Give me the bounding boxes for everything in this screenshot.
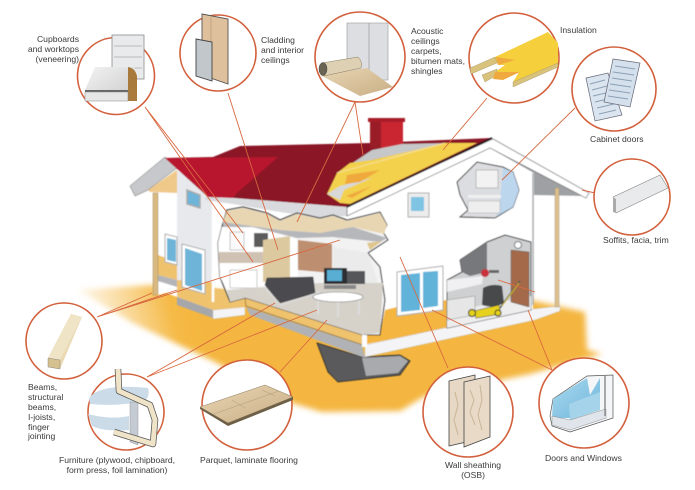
label: beams: structural: [28, 392, 63, 402]
label: beams: beams,: [28, 402, 56, 412]
red tool: [481, 269, 499, 277]
large window: [397, 266, 443, 316]
sofa: [265, 277, 320, 305]
label: acoustic: bitumen mats,: [411, 56, 465, 66]
computer: [324, 268, 365, 289]
circle: acoustic ceilings, carpets: [315, 12, 405, 102]
label: acoustic: ceilings: [411, 36, 440, 46]
label: cladding: Cladding: [261, 35, 295, 45]
circle: cabinet doors: [572, 47, 656, 131]
circle: wall sheathing: [423, 367, 513, 457]
left wing: [130, 157, 245, 319]
label: beams: finger: [28, 422, 50, 432]
label: cupboards: and worktops: [28, 44, 79, 54]
living room cutaway: [218, 207, 388, 345]
label: cabinet doors: Cabinet doors: [590, 134, 644, 144]
label: beams: I-joists,: [28, 412, 55, 422]
leader lines: [97, 93, 595, 377]
circle: furniture: [88, 369, 164, 450]
ground shadow: [78, 285, 602, 412]
label: acoustic: carpets,: [411, 46, 442, 56]
label: cupboards: Cupboards: [37, 34, 79, 44]
tyres: [482, 285, 504, 307]
roof insulation cutaway: [327, 143, 477, 204]
label: cladding: ceilings: [261, 55, 290, 65]
label: soffits: Soffits, facia, trim: [603, 235, 669, 245]
label: beams: Beams,: [28, 382, 57, 392]
label: parquet: Parquet, laminate flooring: [200, 455, 298, 465]
label: wall sheathing: Wall sheathing: [445, 460, 501, 470]
label: acoustic: shingles: [411, 66, 443, 76]
label: insulation: Insulation: [560, 25, 597, 35]
chimney: [368, 118, 405, 148]
roof: [165, 138, 492, 218]
door: [511, 250, 529, 307]
circle: soffits: [594, 159, 670, 235]
circle: beams: [26, 303, 102, 379]
small upper window: [408, 193, 429, 217]
garage cutaway: [447, 235, 531, 328]
label: acoustic: Acoustic: [411, 26, 444, 36]
label: furniture: form press, foil lamination): [67, 465, 168, 475]
circle: parquet: [200, 360, 293, 450]
circle: cupboards and worktops: [78, 35, 154, 114]
coffee table: [313, 292, 363, 317]
circle: cladding: [180, 14, 256, 91]
house illustration: [130, 118, 589, 382]
box: [447, 296, 475, 320]
label: cladding: and interior: [261, 45, 304, 55]
label: cupboards: (veneering): [36, 54, 79, 64]
circle: insulation: [469, 13, 559, 103]
upper cutaway: bathroom: [457, 162, 519, 218]
circle: doors and windows: [539, 358, 629, 448]
label: doors and windows: Doors and Windows: [545, 453, 622, 463]
label: beams: jointing: [27, 431, 55, 441]
basement: [317, 343, 410, 382]
lawnmower: [468, 281, 520, 318]
label: furniture: Furniture (plywood, chipboard,: [59, 455, 175, 465]
main wall: [347, 138, 589, 357]
label: wall sheathing: (OSB): [461, 470, 485, 480]
windows left wing: [165, 190, 205, 294]
